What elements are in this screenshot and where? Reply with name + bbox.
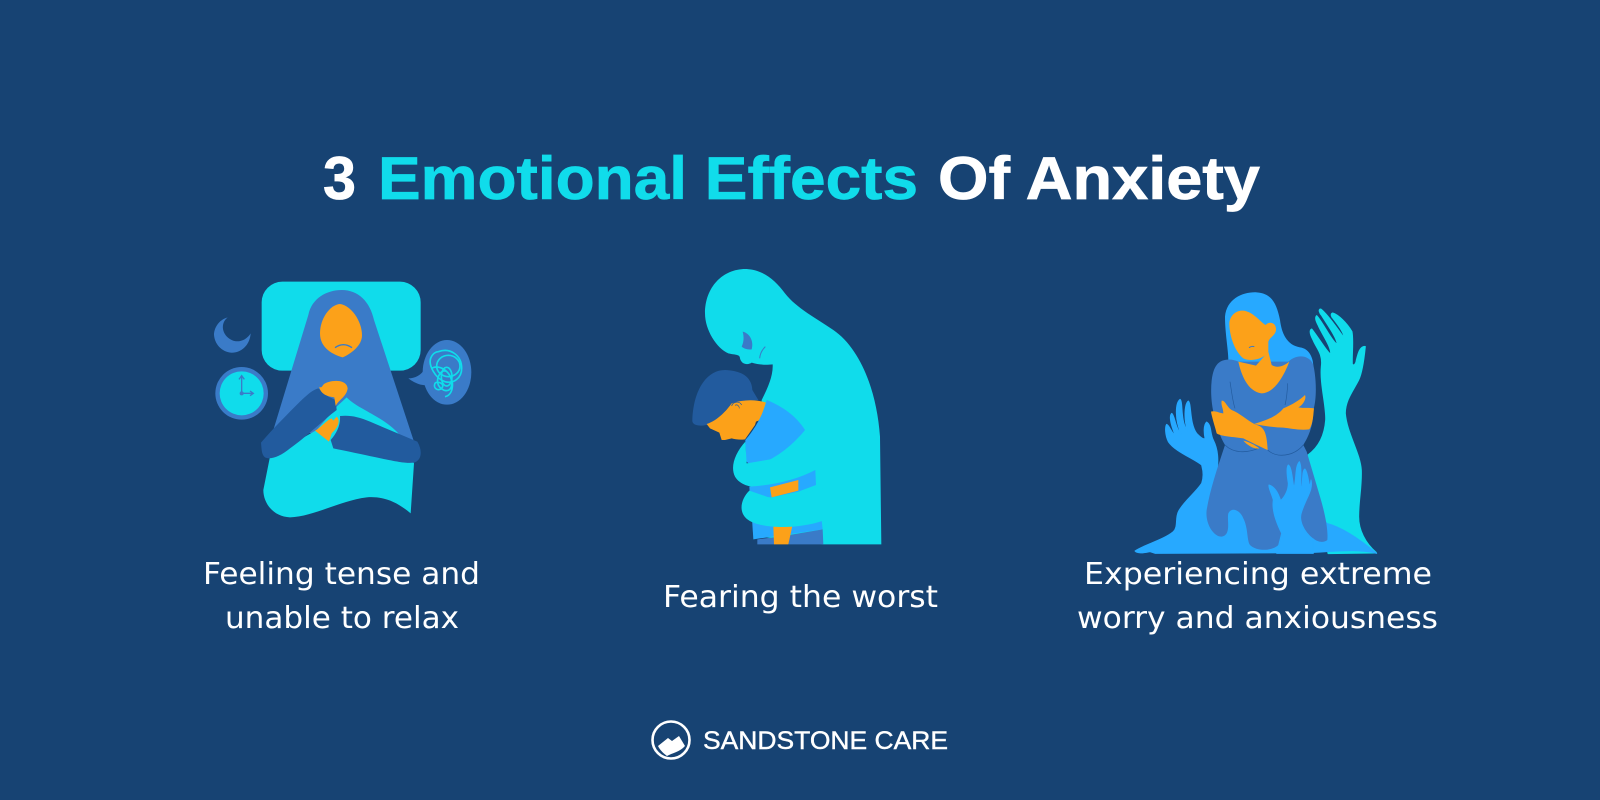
caption: tense: Feeling tense and — [203, 557, 480, 592]
figure mouth — [760, 347, 765, 358]
eye — [1249, 346, 1254, 348]
icon: clock — [215, 367, 268, 420]
caption: tense: unable to relax — [225, 601, 459, 636]
caption: worry: worry and anxiousness — [1077, 601, 1438, 636]
title: Of Anxiety — [938, 145, 1261, 212]
logo mark — [652, 722, 690, 758]
boy pants — [757, 529, 823, 544]
hair — [1225, 292, 1313, 370]
frown — [335, 345, 352, 348]
dress — [1206, 356, 1328, 550]
icon: tangled thought bubble — [408, 340, 471, 405]
blue puddle and left hand — [1135, 399, 1377, 553]
body and hood — [273, 290, 414, 442]
lower wrapping arm — [742, 488, 823, 527]
illustration: woman surrounded by reaching hands — [1135, 292, 1377, 553]
lower shirt — [752, 518, 823, 539]
illustration: person lying awake in bed — [214, 282, 471, 517]
right arm — [331, 416, 421, 463]
title: Emotional Effects — [378, 145, 918, 212]
boy shirt — [745, 400, 805, 465]
boy hair — [692, 370, 758, 426]
pillow — [262, 282, 421, 371]
boy ear — [732, 402, 742, 408]
blanket — [263, 397, 414, 517]
face — [320, 304, 362, 357]
neck and chest — [1238, 352, 1289, 393]
illustration: shadow figure hugging a boy — [692, 269, 881, 544]
caption: tense — [203, 557, 480, 636]
lower tucked hand — [1243, 441, 1259, 449]
title — [323, 145, 1261, 212]
hand rising from puddle — [1269, 462, 1313, 553]
figure eye — [742, 332, 752, 349]
shadow figure — [705, 269, 881, 544]
cyan reaching arm — [1308, 309, 1376, 553]
caption: worry: Experiencing extreme — [1084, 557, 1432, 592]
face — [1229, 311, 1276, 360]
boy face — [707, 400, 766, 440]
orange waist — [770, 480, 798, 497]
orange leg — [773, 526, 792, 544]
caption: worry — [1077, 557, 1438, 636]
logo wordmark: SANDSTONE CARE — [703, 727, 948, 755]
left crossed arm — [1211, 401, 1268, 450]
right crossed arm — [1254, 395, 1314, 430]
upper hand — [319, 381, 348, 406]
lower hand — [315, 417, 339, 442]
dress folds — [1225, 382, 1303, 455]
title: 3 — [323, 145, 356, 212]
logo — [652, 722, 948, 758]
icon: moon — [214, 317, 251, 353]
left arm — [261, 388, 337, 458]
shirt band — [749, 470, 816, 497]
caption: fear: Fearing the worst — [663, 580, 938, 615]
upper wrapping arm — [733, 442, 793, 487]
